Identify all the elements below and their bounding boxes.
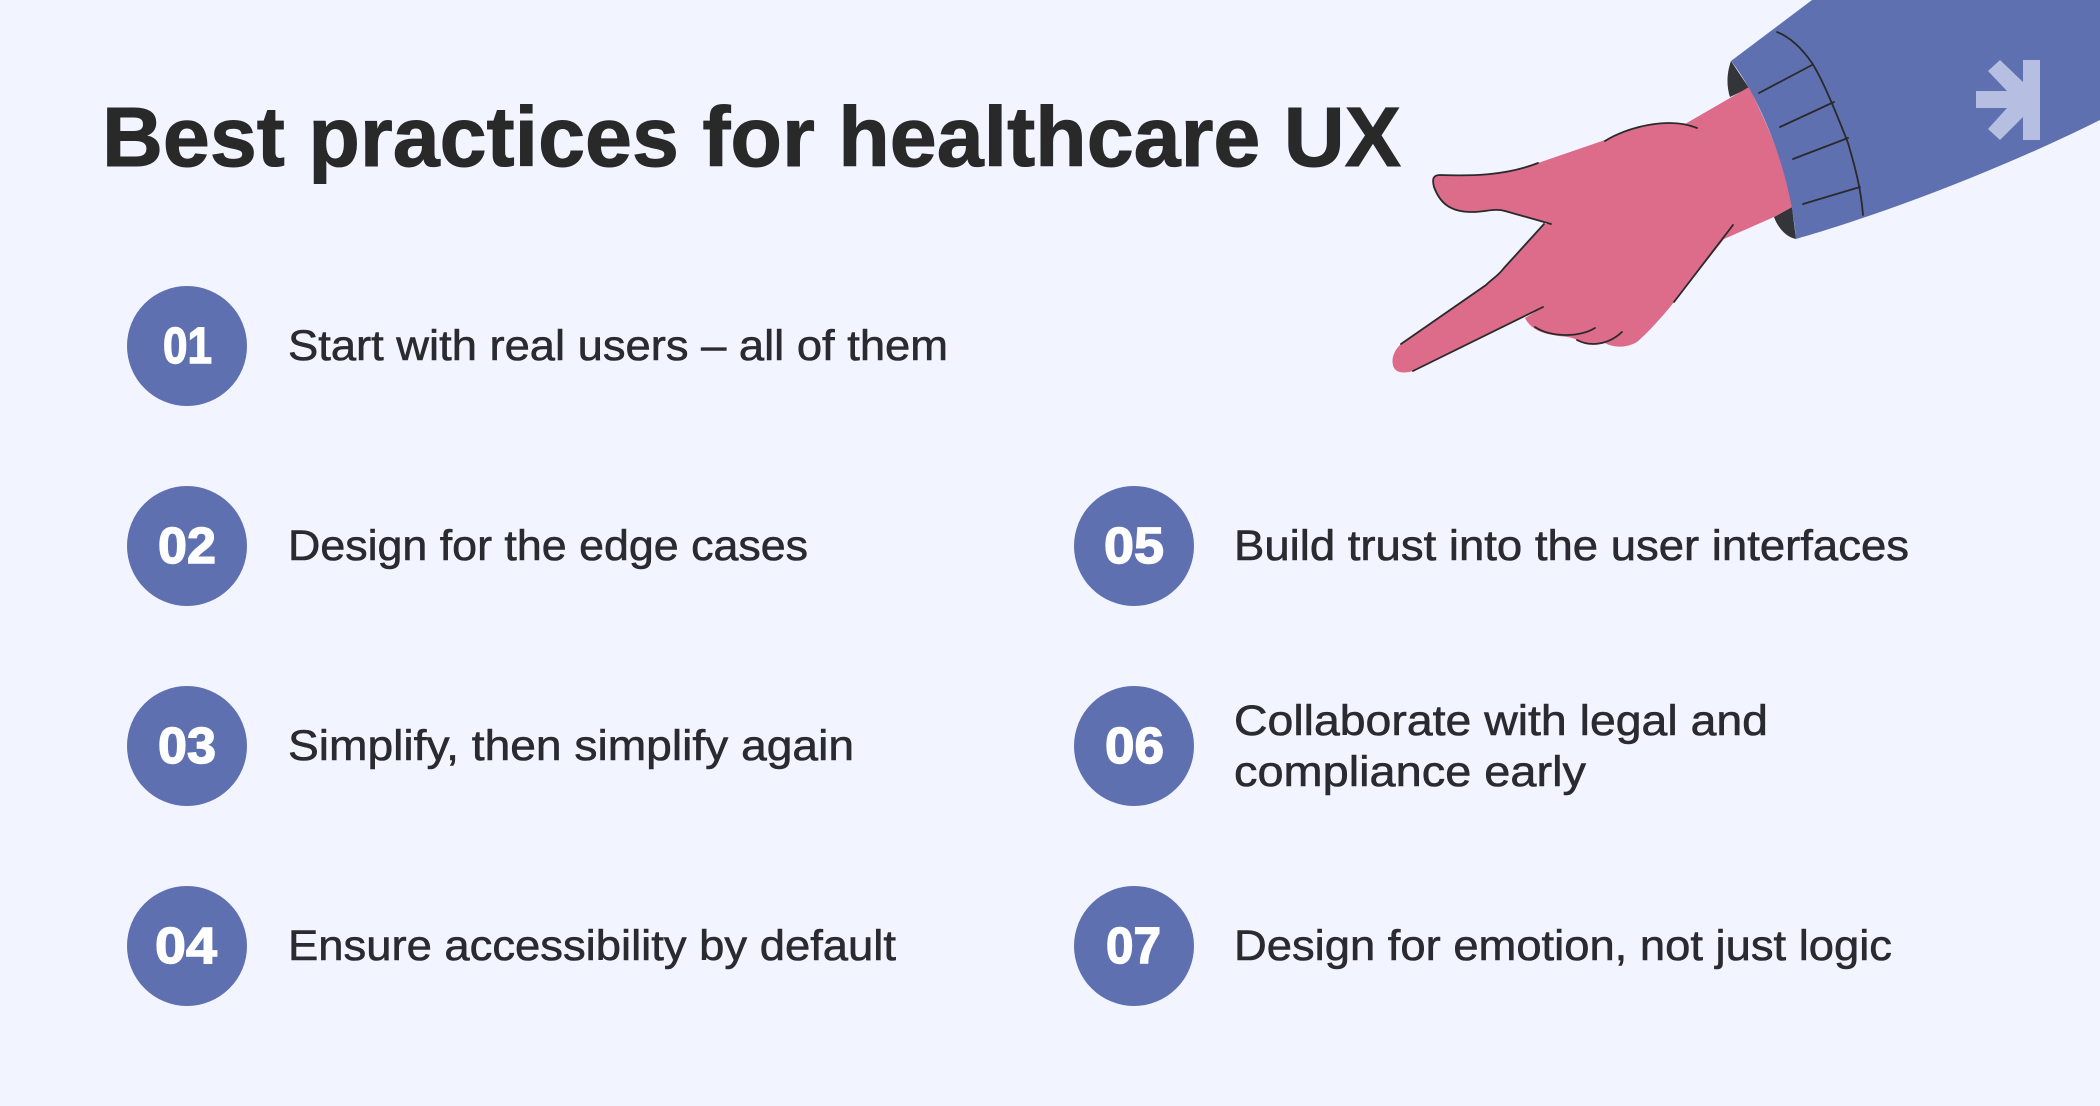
title: Best practices for healthcare UX — [102, 90, 1401, 184]
item 07: 07 — [1106, 917, 1161, 974]
item 05: Build trust into the user interfaces — [1234, 522, 1909, 570]
item 03: 03 — [158, 717, 216, 774]
item 04: 04 — [155, 917, 218, 974]
item 06 — [1074, 686, 1768, 806]
item 06: Collaborate with legal and — [1234, 697, 1768, 745]
item 06: compliance early — [1234, 748, 1587, 796]
item 01: 01 — [163, 317, 212, 374]
item 05 — [1074, 486, 1909, 606]
item 01 — [127, 286, 948, 406]
item 02: 02 — [158, 517, 216, 574]
item 06: 06 — [1105, 717, 1164, 774]
hand — [1392, 87, 1792, 373]
item 05: 05 — [1104, 517, 1164, 574]
item 07: Design for emotion, not just logic — [1234, 922, 1892, 970]
hand outlines — [1401, 123, 1733, 371]
item 01: Start with real users – all of them — [288, 322, 948, 370]
item 07 — [1074, 886, 1892, 1006]
illustration: pointing hand with sleeve — [1392, 0, 2100, 373]
sleeve — [1731, 0, 2100, 239]
item 03 — [127, 686, 854, 806]
logo mark — [1976, 60, 2040, 140]
item 02: Design for the edge cases — [288, 522, 808, 570]
item 04: Ensure accessibility by default — [288, 922, 896, 970]
sleeve inner lining — [1728, 61, 1796, 239]
item 02 — [127, 486, 808, 606]
item 03: Simplify, then simplify again — [288, 722, 854, 770]
sleeve cuff lines — [1759, 32, 1863, 215]
item 04 — [127, 886, 896, 1006]
